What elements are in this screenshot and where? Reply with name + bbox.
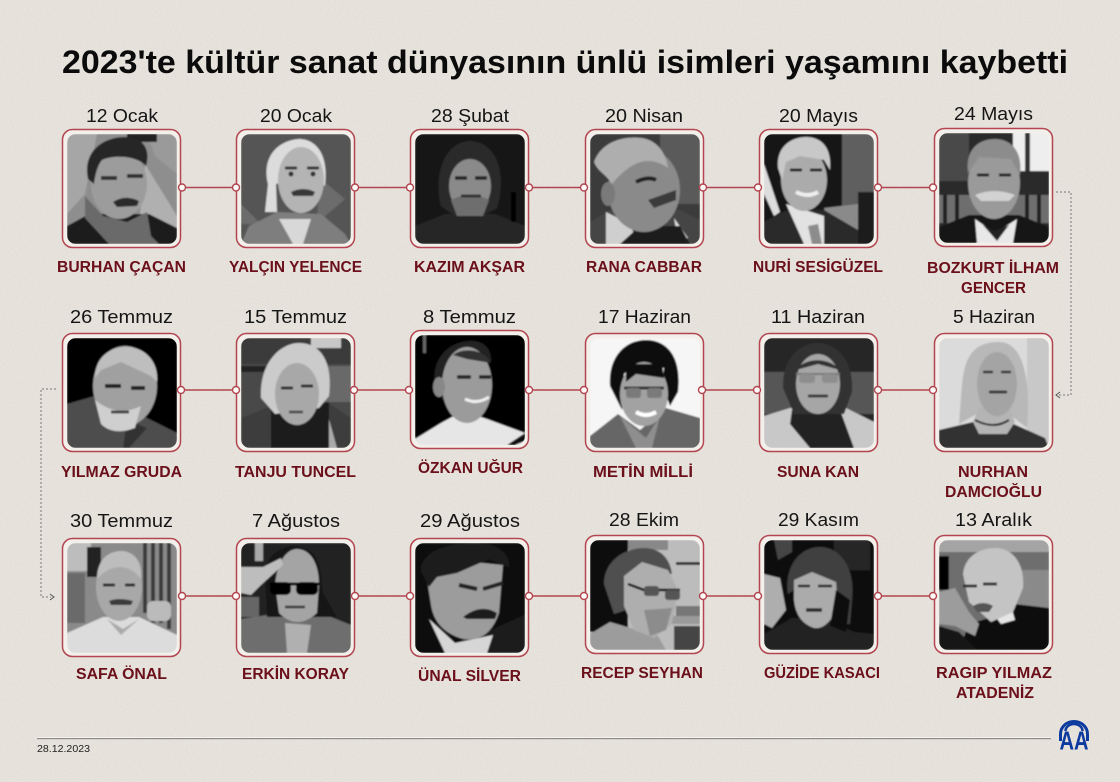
date: 20 Ocak xyxy=(260,105,333,126)
panel: Erkin Koray xyxy=(236,510,354,683)
date: 11 Haziran xyxy=(771,306,865,327)
date: 28 Ekim xyxy=(609,509,679,530)
name: RAGIP YILMAZ xyxy=(936,665,1052,682)
date: 20 Mayıs xyxy=(779,105,858,126)
name: YILMAZ GRUDA xyxy=(61,464,182,481)
name: RANA CABBAR xyxy=(586,259,702,276)
panel: Nurhan Damcıoğlu xyxy=(934,306,1052,501)
arrow: dotted link from row 2 to row 3 xyxy=(41,389,56,600)
panel: Suna Kan xyxy=(760,306,878,481)
photo frame xyxy=(586,536,704,654)
photo frame xyxy=(760,334,878,452)
date: 5 Haziran xyxy=(953,306,1035,327)
portrait xyxy=(590,338,700,448)
portrait xyxy=(590,540,700,650)
portrait xyxy=(241,134,351,244)
photo frame xyxy=(236,334,354,452)
panel: Safa Önal xyxy=(62,510,180,683)
photo frame xyxy=(934,334,1052,452)
footer date: 28.12.2023 xyxy=(37,744,90,755)
name: KAZIM AKŞAR xyxy=(414,259,525,276)
photo frame xyxy=(586,334,704,452)
portrait xyxy=(241,338,351,448)
photo frame xyxy=(62,130,180,248)
date: 12 Ocak xyxy=(86,105,159,126)
name: SUNA KAN xyxy=(777,464,859,481)
portrait xyxy=(764,540,874,650)
panel: Özkan Uğur xyxy=(410,306,528,477)
photo frame xyxy=(410,330,528,448)
date: 29 Ağustos xyxy=(420,510,520,531)
connectors: row 1 timeline xyxy=(178,184,936,191)
name: RECEP SEYHAN xyxy=(581,665,703,682)
portrait xyxy=(415,134,525,244)
portrait xyxy=(764,134,874,244)
date: 13 Aralık xyxy=(955,509,1033,530)
footer rule xyxy=(37,737,1051,739)
name line 2: ATADENİZ xyxy=(956,684,1034,702)
photo frame xyxy=(934,536,1052,654)
photo frame xyxy=(586,130,704,248)
date: 28 Şubat xyxy=(431,105,509,126)
panel: Burhan Çaçan xyxy=(57,105,186,276)
name: YALÇIN YELENCE xyxy=(229,259,362,276)
photo frame xyxy=(760,536,878,654)
name: GÜZİDE KASACI xyxy=(764,663,880,682)
panel: Kazım Akşar xyxy=(410,105,528,276)
portrait xyxy=(939,133,1049,243)
photo frame xyxy=(62,538,180,656)
date: 8 Temmuz xyxy=(423,306,516,327)
name line 2: DAMCIOĞLU xyxy=(945,482,1042,501)
name: ÜNAL SİLVER xyxy=(418,666,521,685)
panel: Yılmaz Gruda xyxy=(61,306,182,481)
photo frame xyxy=(934,128,1052,246)
date: 24 Mayıs xyxy=(954,103,1033,124)
photo frame xyxy=(236,130,354,248)
portrait xyxy=(241,543,351,653)
title: 2023'te kültür sanat dünyasının ünlü isimleri yaşamını kaybetti xyxy=(62,44,1068,80)
photo frame xyxy=(760,130,878,248)
name: METİN MİLLİ xyxy=(593,463,693,481)
name: ERKİN KORAY xyxy=(242,665,349,683)
portrait xyxy=(415,335,525,445)
date: 30 Temmuz xyxy=(70,510,173,531)
panel: Ünal Silver xyxy=(410,510,528,685)
panel: Ragıp Yılmaz Atadeniz xyxy=(934,509,1052,702)
arrow: dotted link from row 1 to row 2 xyxy=(1056,192,1071,398)
name: NURHAN xyxy=(958,464,1028,481)
date: 7 Ağustos xyxy=(252,510,340,531)
panel: Tanju Tuncel xyxy=(235,306,356,481)
panel: Bozkurt İlham Gencer xyxy=(927,103,1059,297)
panel: Yalçın Yelence xyxy=(229,105,362,276)
panel: Rana Cabbar xyxy=(586,105,704,276)
portrait xyxy=(590,134,700,244)
panel: Güzide Kasacı xyxy=(760,509,880,682)
portrait xyxy=(67,543,177,653)
panel: Metin Milli xyxy=(586,306,704,481)
date: 20 Nisan xyxy=(605,105,683,126)
photo frame xyxy=(62,334,180,452)
photo frame xyxy=(236,538,354,656)
name: BURHAN ÇAÇAN xyxy=(57,259,186,276)
portrait xyxy=(939,540,1049,650)
photo frame xyxy=(410,130,528,248)
icon: AA logo: AA xyxy=(1060,726,1089,756)
date: 15 Temmuz xyxy=(244,306,347,327)
portrait xyxy=(67,134,177,244)
date: 29 Kasım xyxy=(778,509,859,530)
portrait xyxy=(415,543,525,653)
portrait xyxy=(939,338,1049,448)
date: 17 Haziran xyxy=(598,306,691,327)
name: BOZKURT İLHAM xyxy=(927,259,1059,277)
photo frame xyxy=(410,538,528,656)
connectors: row 2 timeline xyxy=(178,386,936,394)
panel: Nuri Sesigüzel xyxy=(753,105,883,276)
name: ÖZKAN UĞUR xyxy=(418,458,523,477)
portrait xyxy=(764,338,874,448)
name: NURİ SESİGÜZEL xyxy=(753,257,883,276)
panel: Recep Seyhan xyxy=(581,509,704,682)
name line 2: GENCER xyxy=(961,280,1026,297)
name: SAFA ÖNAL xyxy=(76,664,167,683)
name: TANJU TUNCEL xyxy=(235,464,356,481)
portrait xyxy=(67,338,177,448)
date: 26 Temmuz xyxy=(70,306,173,327)
connectors: row 3 timeline xyxy=(178,592,936,600)
